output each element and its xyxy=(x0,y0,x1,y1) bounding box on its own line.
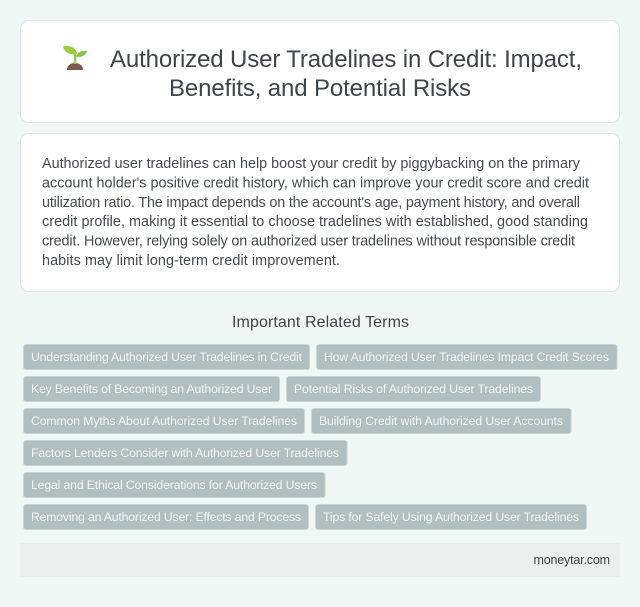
title xyxy=(110,46,582,102)
chip: common myths: Common Myths About Authorized User Tradelines xyxy=(31,414,297,428)
chip: credit scores: How Authorized User Tradelines Impact Credit Scores xyxy=(324,350,609,364)
chip: understanding xyxy=(24,344,310,370)
chip: removing xyxy=(24,504,308,530)
heading: important related terms: Important Related Terms xyxy=(232,314,409,331)
text block: summary paragraph: account holder's positive credit history, which can improve your credit score and credit xyxy=(42,175,589,191)
text block: summary paragraph: Authorized user tradelines can help boost your credit by piggybacking on the primary xyxy=(42,156,581,172)
text block: summary paragraph: utilization ratio. The impact depends on the account's age, payment history, and overall xyxy=(42,195,580,211)
footer text: site name: moneytar.com xyxy=(534,553,610,567)
title: Authorized User Tradelines in Credit: Impact, xyxy=(110,46,582,73)
chip: building credit: Building Credit with Authorized User Accounts xyxy=(319,414,563,428)
chip: potential risks xyxy=(286,376,540,402)
chip: common myths xyxy=(24,408,304,434)
chip: key benefits: Key Benefits of Becoming an Authorized User xyxy=(31,382,272,396)
chip: building credit xyxy=(312,408,571,434)
text block: summary paragraph: credit. However, relying solely on authorized user tradelines without responsible credit xyxy=(42,234,575,250)
chip: legal and ethical xyxy=(24,472,325,498)
term chips xyxy=(24,344,617,530)
text block: summary paragraph xyxy=(42,156,589,269)
title: Benefits, and Potential Risks xyxy=(169,75,471,102)
chip: understanding: Understanding Authorized User Tradelines in Credit xyxy=(31,350,303,364)
chip: factors lenders: Factors Lenders Consider with Authorized User Tradelines xyxy=(31,446,339,460)
text block: summary paragraph: habits may limit long-term credit improvement. xyxy=(42,253,340,269)
footer xyxy=(20,543,620,577)
chip: key benefits xyxy=(24,376,280,402)
chip: removing: Removing an Authorized User: Effects and Process xyxy=(31,510,301,524)
chip: factors lenders xyxy=(24,440,347,466)
panel: header xyxy=(20,20,620,122)
panel: summary xyxy=(20,134,620,292)
chip: tips xyxy=(316,504,586,530)
chip: potential risks: Potential Risks of Authorized User Tradelines xyxy=(294,382,533,396)
chip: legal and ethical: Legal and Ethical Considerations for Authorized Users xyxy=(31,478,317,492)
chip: credit scores xyxy=(316,344,617,370)
text block: summary paragraph: credit profile, making it essential to choose tradelines with established, good standing xyxy=(42,214,588,230)
icon: sprout xyxy=(63,46,87,70)
chip: tips: Tips for Safely Using Authorized User Tradelines xyxy=(323,510,579,524)
